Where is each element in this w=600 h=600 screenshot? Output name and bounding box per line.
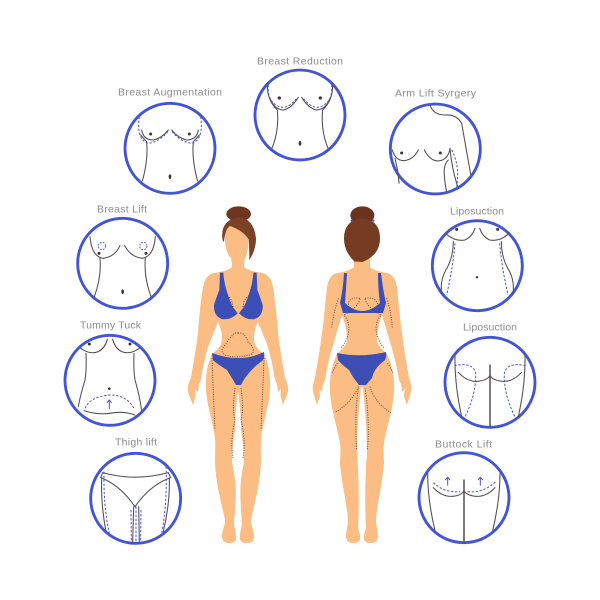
back body <box>313 255 411 543</box>
label: liposuction: Liposuction <box>450 206 504 218</box>
icon: tummy tuck circle <box>65 335 155 425</box>
panel: buttock lift <box>419 438 509 543</box>
label: breast lift: Breast Lift <box>97 204 147 216</box>
back bikini bottom <box>337 352 386 385</box>
panel: liposuction hips <box>445 322 535 427</box>
front view figure <box>188 206 288 543</box>
icon: breast augmentation circle <box>125 103 215 193</box>
label: liposuction: Liposuction <box>463 322 517 334</box>
panel: liposuction torso <box>432 206 522 311</box>
icon: arm lift circle <box>390 104 480 194</box>
front bikini top <box>214 273 263 319</box>
label: breast reduction: Breast Reduction <box>257 56 343 68</box>
label: arm lift: Arm Lift Syrgery <box>395 88 477 100</box>
icon: liposuction torso circle <box>432 221 522 311</box>
panel: breast reduction <box>255 56 345 160</box>
icon: breast reduction circle <box>255 70 345 160</box>
front dotted surgery marks <box>212 295 264 458</box>
icon: thigh lift circle <box>91 453 181 543</box>
front bikini bottom <box>212 352 264 385</box>
label: buttock lift: Buttock Lift <box>435 438 492 450</box>
panel: thigh lift <box>91 436 181 543</box>
panel: arm lift surgery <box>390 88 480 194</box>
panel: tummy tuck <box>65 320 155 425</box>
front head and hair <box>222 206 256 263</box>
front body <box>188 255 288 543</box>
back view figure <box>313 206 411 543</box>
back bikini top <box>340 273 386 313</box>
label: breast augmentation: Breast Augmentation <box>118 86 222 98</box>
panel: breast augmentation <box>118 86 222 193</box>
label: tummy tuck: Tummy Tuck <box>80 320 142 332</box>
panel: breast lift <box>78 204 168 308</box>
label: thigh lift: Thigh lift <box>115 436 157 448</box>
back dotted surgery marks <box>332 298 393 450</box>
back head and hair <box>344 206 380 262</box>
icon: breast lift circle <box>78 218 168 308</box>
icon: liposuction hips circle <box>445 337 535 427</box>
icon: buttock lift circle <box>419 453 509 543</box>
